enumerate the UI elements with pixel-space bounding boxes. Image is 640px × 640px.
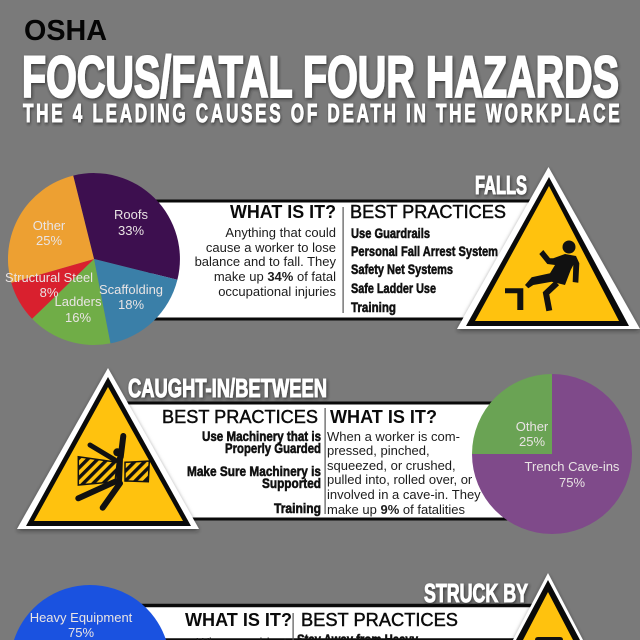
subtitle: THE 4 LEADING CAUSES OF DEATH IN THE WORKPLACE — [23, 98, 620, 128]
text block: best practices, caught-in: Make Sure Machinery is — [187, 463, 321, 479]
pie chart: caught-in/between — [472, 374, 632, 534]
icon: struck-by warning triangle — [513, 573, 583, 640]
text block: what is it, caught-in: pressed, pinched, — [327, 443, 430, 458]
text block: best practices, falls: BEST PRACTICES — [350, 202, 506, 222]
pie chart: falls: 18% — [118, 297, 144, 312]
pie chart: falls: 8% — [40, 285, 59, 300]
panel: falls — [5, 167, 640, 345]
pie chart: falls: Structural Steel — [5, 270, 93, 285]
pie chart: caught-in/between: Trench Cave-ins — [525, 459, 620, 474]
panel card: falls — [150, 201, 560, 319]
text block: best practices, falls — [350, 202, 506, 315]
pie chart: struck by — [14, 585, 166, 640]
text block: best practices, falls: Use Guardrails — [351, 225, 430, 241]
pie chart: falls: 33% — [118, 223, 144, 238]
text block: what is it, caught-in: involved in a cave-in. They — [327, 487, 481, 502]
text block: best practices, struck by — [297, 610, 458, 640]
icon: caught-between warning triangle — [17, 368, 199, 529]
pie chart: caught-in/between: 75% — [559, 475, 585, 490]
text block: best practices, caught-in: Supported — [262, 475, 321, 491]
divider — [342, 207, 344, 313]
text block: what is it, caught-in: pulled into, rolled over, or — [327, 472, 473, 487]
text block: best practices, falls: Training — [351, 299, 396, 315]
text block: what is it, falls: Anything that could — [225, 225, 336, 240]
pie chart: falls: 25% — [36, 233, 62, 248]
text block: best practices, caught-in: Training — [274, 500, 321, 516]
text block: what is it, caught-in: WHAT IS IT? — [330, 407, 437, 427]
panel: struck by — [14, 573, 583, 640]
text block: what is it, caught-in: make up 9% of fatalities — [327, 502, 466, 517]
pie chart: falls — [5, 173, 180, 345]
divider — [292, 613, 294, 640]
text block: what is it, falls: cause a worker to lose — [206, 240, 336, 255]
section label: falls: FALLS — [475, 170, 527, 200]
text block: what is it, falls: make up 34% of fatal — [214, 269, 336, 284]
text block: what is it, falls: occupational injuries — [218, 284, 336, 299]
pie chart: struck by: Heavy Equipment — [30, 610, 133, 625]
panel card: struck by — [140, 606, 550, 640]
pie chart: falls: 16% — [65, 310, 91, 325]
text block: best practices, caught-in: Use Machinery that is — [202, 428, 321, 444]
pie chart: caught-in/between: Other — [516, 419, 549, 434]
text block: what is it, caught-in: When a worker is com- — [327, 429, 460, 444]
text block: what is it, caught-in: squeezed, or crushed, — [327, 458, 456, 473]
pie chart: falls: Scaffolding — [99, 282, 163, 297]
icon: falling worker warning triangle — [457, 167, 640, 329]
section label: struck by: STRUCK BY — [424, 578, 528, 608]
text block: best practices, falls: Personal Fall Arrest System — [351, 243, 498, 259]
organisation label: OSHA: OSHA — [24, 15, 107, 47]
section label: caught-in/between: CAUGHT-IN/BETWEEN — [128, 373, 327, 403]
text block: what is it, struck by — [185, 610, 292, 640]
pie chart: falls: Ladders — [55, 294, 102, 309]
text block: what is it, falls: WHAT IS IT? — [230, 202, 336, 222]
text block: what is it, falls — [195, 202, 336, 299]
text block: best practices, struck by: BEST PRACTICES — [301, 610, 458, 630]
text block: what is it, falls: balance and to fall. They — [195, 254, 336, 269]
text block: best practices, falls: Safe Ladder Use — [351, 280, 436, 296]
pie chart: struck by: 75% — [68, 625, 94, 640]
text block: best practices, caught-in — [162, 407, 321, 516]
panel: caught-in/between — [17, 368, 632, 534]
pie chart: caught-in/between: 25% — [519, 434, 545, 449]
pie chart: falls: Roofs — [114, 207, 148, 222]
text block: what is it, caught-in — [327, 407, 481, 517]
panel card: caught-in/between — [120, 403, 530, 519]
text block: best practices, caught-in: Properly Guarded — [225, 440, 321, 456]
divider — [324, 408, 326, 514]
text block: best practices, caught-in: BEST PRACTICES — [162, 407, 318, 427]
text block: what is it, struck by: WHAT IS IT? — [185, 610, 292, 630]
text block: best practices, falls: Safety Net Systems — [351, 261, 453, 277]
pie chart: falls: Other — [33, 218, 66, 233]
